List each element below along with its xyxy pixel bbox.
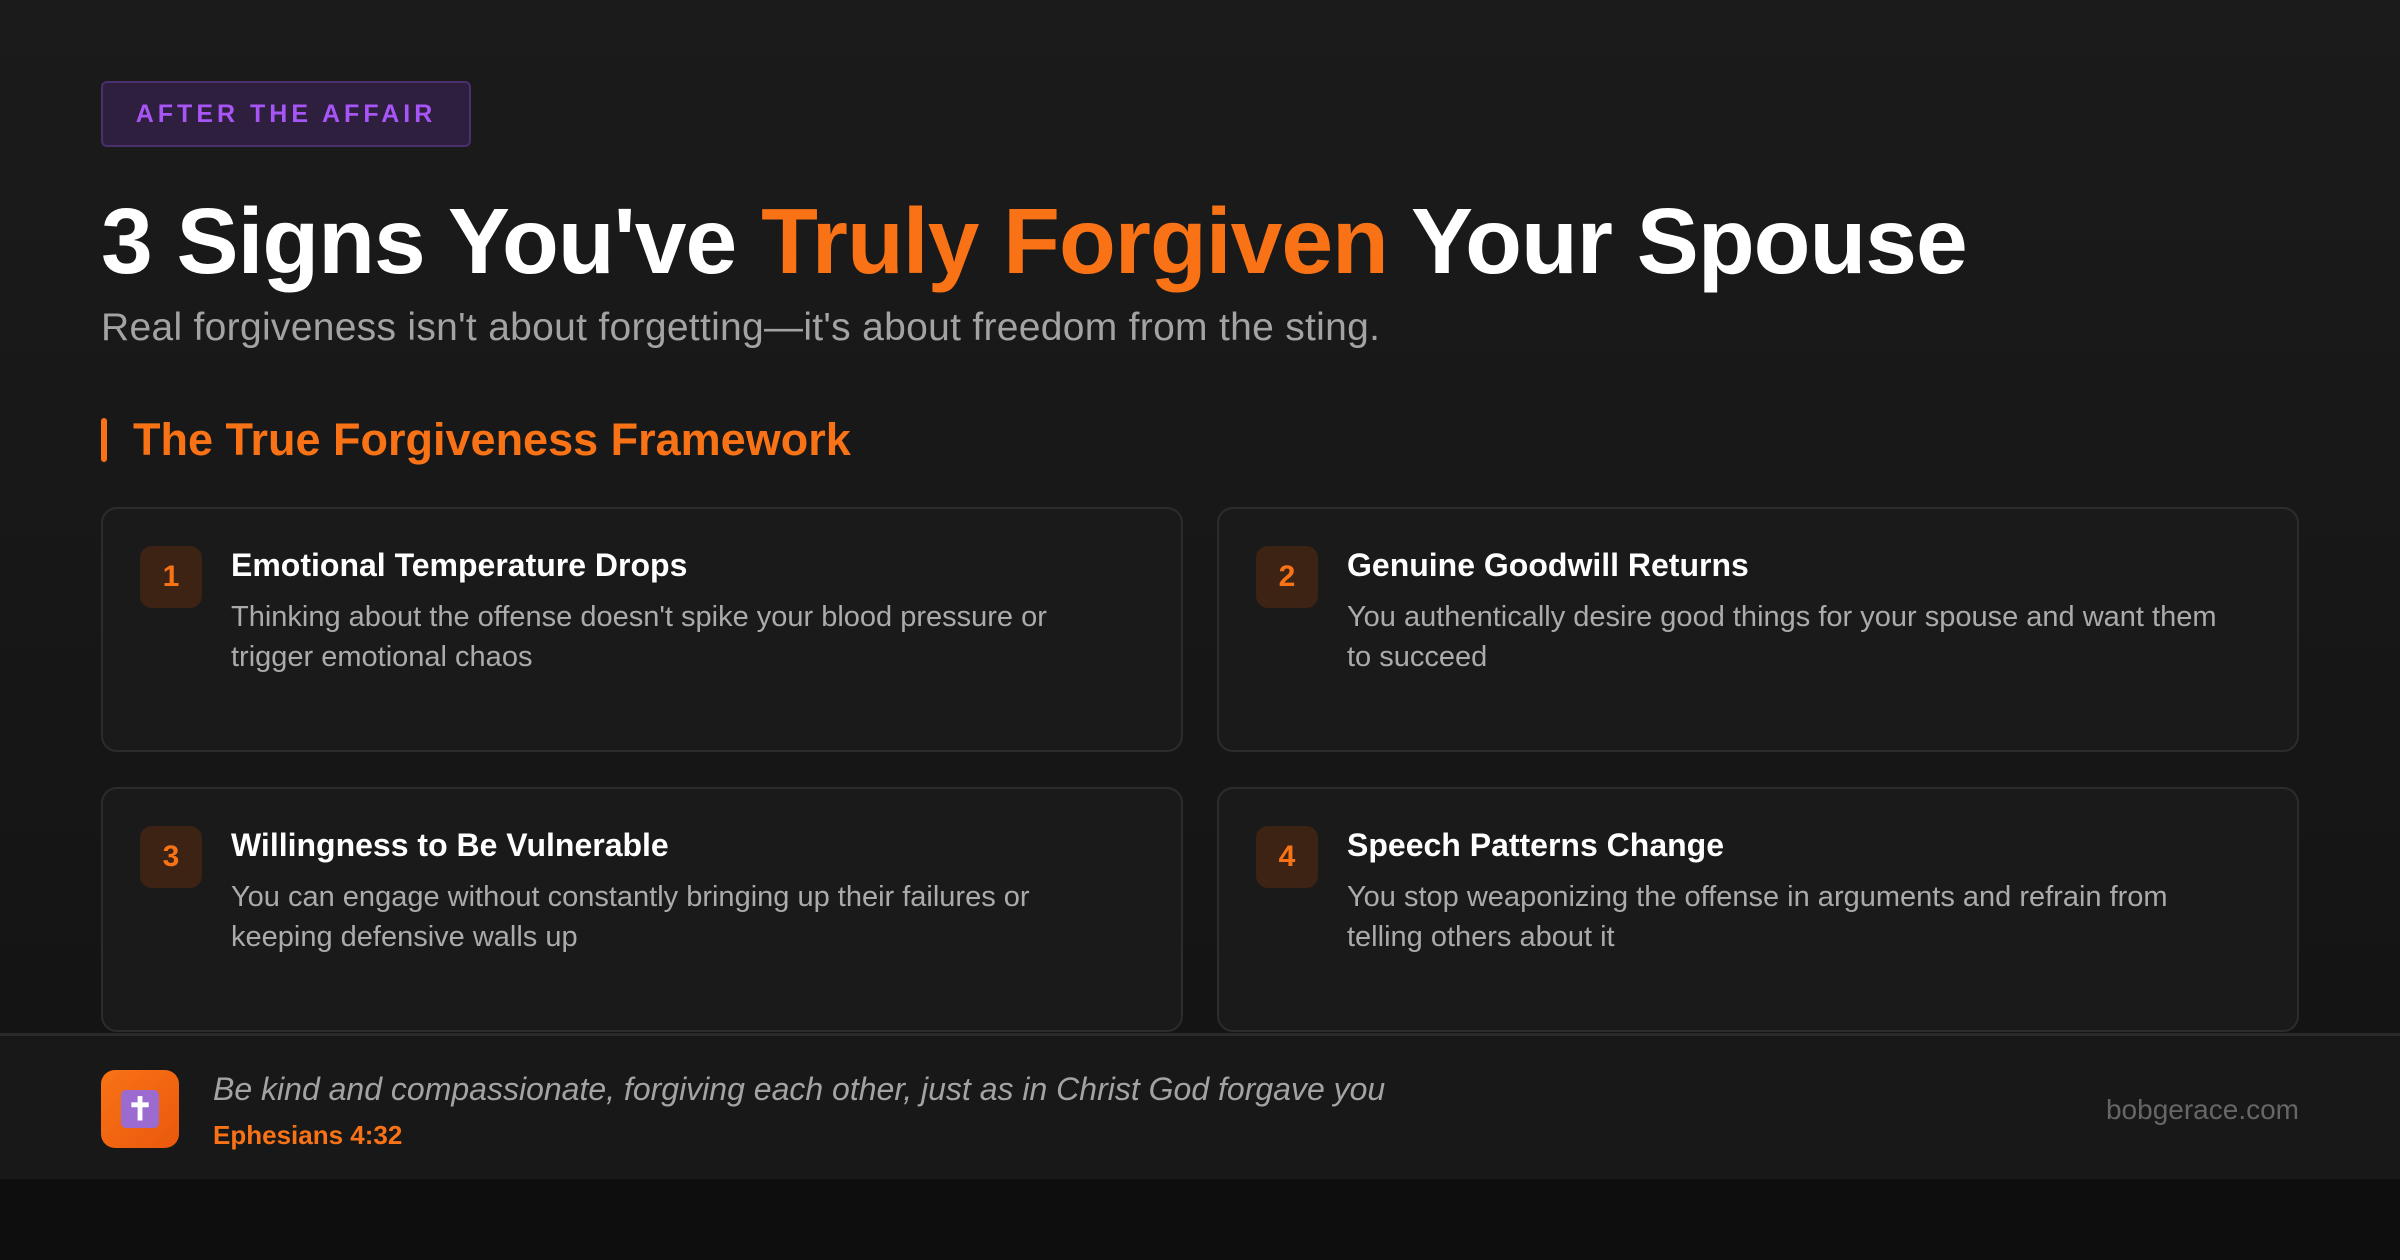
quote: Be kind and compassionate, forgiving each other, just as in Christ God forgave you	[213, 1071, 1385, 1107]
badge: after the affair: AFTER THE AFFAIR	[136, 100, 436, 128]
card 2	[1217, 507, 2299, 752]
scripture reference: Ephesians 4:32	[213, 1120, 402, 1150]
card 3	[101, 787, 1183, 1032]
number badge 3	[140, 826, 202, 888]
card 1	[101, 507, 1183, 752]
number badge 2	[1256, 546, 1318, 608]
number badge 1: 1	[163, 560, 179, 593]
number badge 1	[140, 546, 202, 608]
card 4	[1217, 787, 2299, 1032]
title: 3 Signs You've Truly Forgiven Your Spouse	[101, 189, 1967, 293]
footer	[0, 1033, 2400, 1179]
number badge 2: 2	[1279, 560, 1295, 593]
card 1 title: Emotional Temperature Drops	[231, 547, 687, 583]
section heading	[101, 414, 851, 465]
badge: after the affair	[101, 81, 471, 147]
card 4 title: Speech Patterns Change	[1347, 827, 1724, 863]
card 2 description: You authentically desire good things for your spouse and want them to succeed	[1347, 601, 2216, 673]
icon: cross: ✝	[127, 1091, 153, 1127]
card 2 title: Genuine Goodwill Returns	[1347, 547, 1749, 583]
site url: bobgerace.com	[2106, 1094, 2299, 1125]
icon: cross	[101, 1070, 179, 1148]
card 3 description: You can engage without constantly bringing up their failures or keeping defensive walls up	[231, 881, 1030, 953]
main background panel: The True Forgiveness Framework	[133, 414, 851, 465]
card 1 description: Thinking about the offense doesn't spike your blood pressure or trigger emotional chaos	[231, 601, 1047, 673]
number badge 3: 3	[163, 840, 179, 873]
number badge 4	[1256, 826, 1318, 888]
card 3 title: Willingness to Be Vulnerable	[231, 827, 669, 863]
card 4 description: You stop weaponizing the offense in arguments and refrain from telling others about it	[1347, 881, 2168, 953]
number badge 4: 4	[1279, 840, 1295, 873]
subtitle: Real forgiveness isn't about forgetting—it's about freedom from the sting.	[101, 306, 1380, 349]
